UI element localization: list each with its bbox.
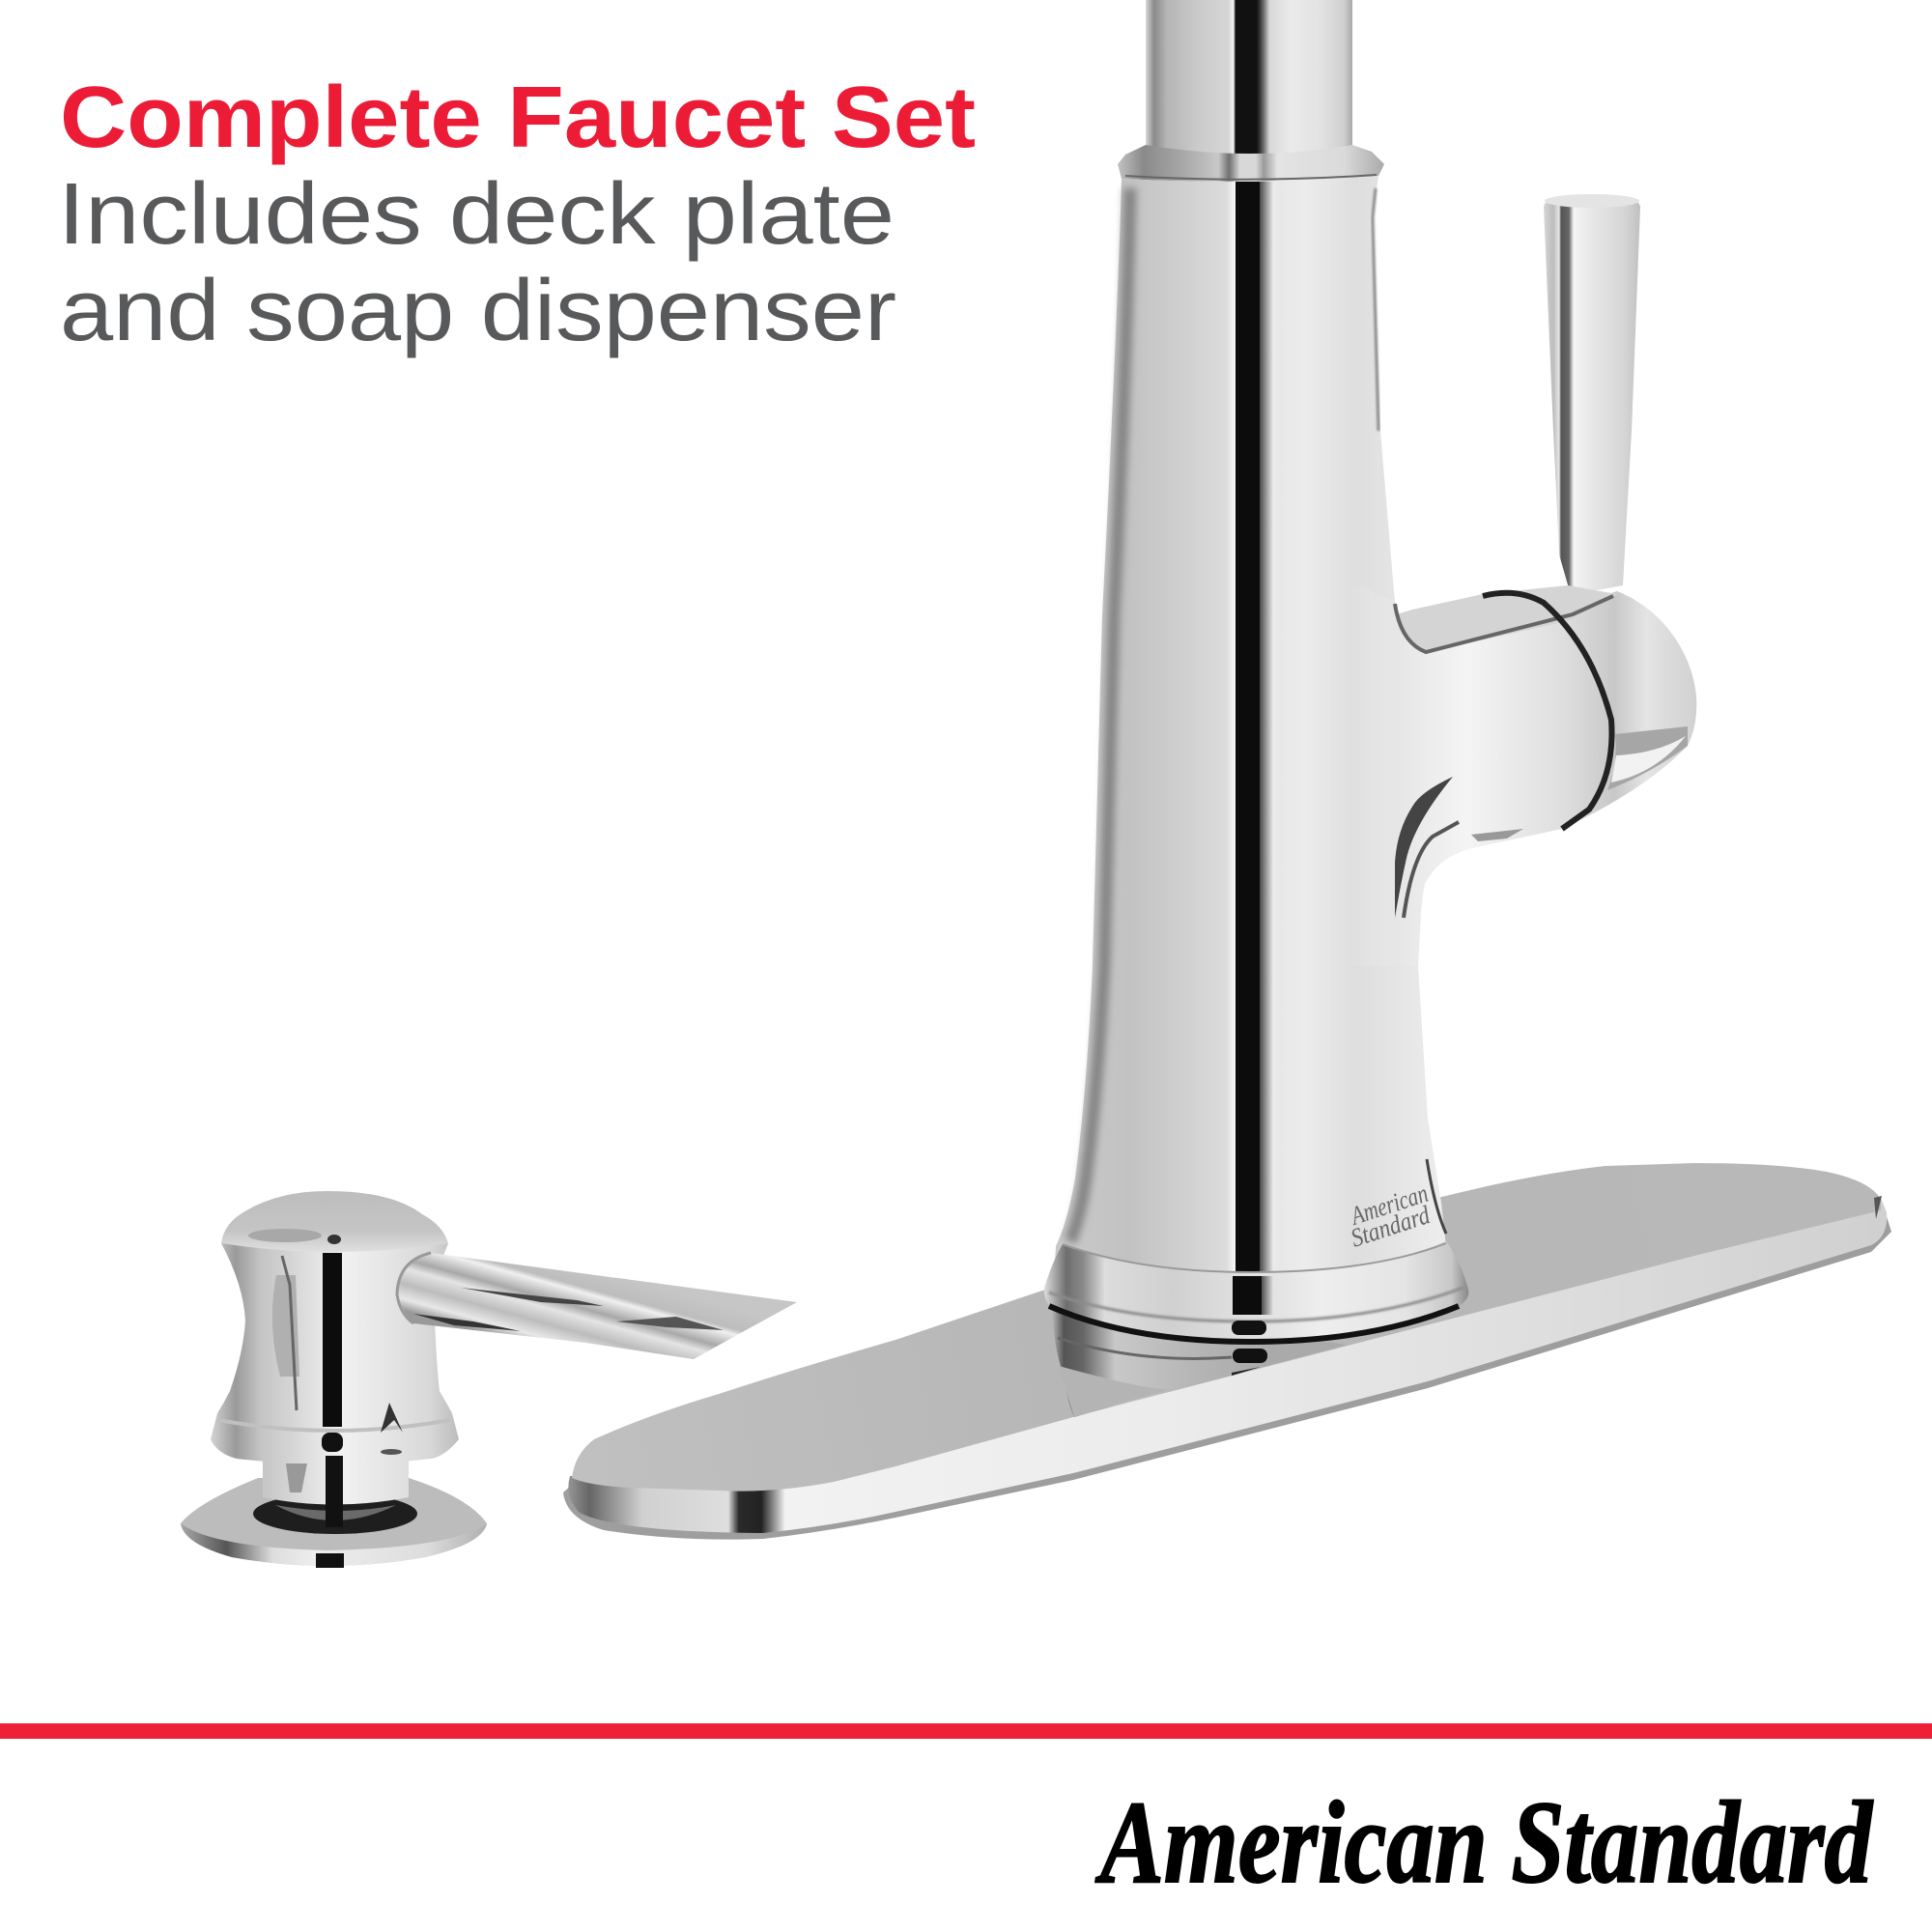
title: Complete Faucet Set	[60, 70, 976, 166]
plate rim shadow	[563, 1208, 1891, 1540]
cap glint	[327, 1235, 341, 1244]
body right edge shading	[1373, 188, 1378, 431]
dispenser rod reflection	[282, 1256, 297, 1410]
underside second swoosh	[1404, 822, 1459, 918]
spout end ring	[397, 1253, 431, 1323]
body lower right dark line	[1427, 1159, 1446, 1234]
body dark stripe	[1236, 182, 1260, 1273]
body left edge shading	[1070, 188, 1130, 1241]
housing top plane	[1397, 585, 1617, 653]
neck inner reflection	[286, 1463, 307, 1492]
faucet reflection in plate	[1051, 1304, 1348, 1417]
underside highlight blob	[1471, 829, 1523, 841]
spout	[398, 1253, 797, 1359]
base ring stripe lower blob	[1232, 1321, 1266, 1335]
handle housing	[1343, 580, 1696, 966]
red divider bar	[0, 1723, 1932, 1739]
flange dark stripe	[316, 1553, 344, 1568]
spout streak base	[413, 1314, 521, 1331]
cap lens reflection	[248, 1229, 322, 1242]
dispenser flange ring lines	[218, 1420, 450, 1431]
dispenser deck flange	[181, 1478, 487, 1566]
dispenser neck	[263, 1454, 409, 1505]
base ring shadow line	[1049, 1306, 1459, 1342]
plate top surface	[572, 1163, 1881, 1492]
base ring stripe fade	[1262, 1276, 1273, 1315]
spout streak upper	[461, 1288, 604, 1306]
small logo on faucet body	[1346, 1179, 1434, 1253]
dispenser stripe lower	[326, 1456, 343, 1527]
small logo on faucet body: American	[1346, 1179, 1432, 1231]
faucet neck	[1146, 0, 1352, 156]
collar lower line	[1125, 175, 1377, 180]
housing top plane dark edge	[1395, 596, 1613, 652]
dispenser recess inner	[275, 1505, 396, 1520]
lever top cap	[1545, 194, 1639, 208]
dispenser small blob	[381, 1449, 402, 1455]
dispenser inner reflection	[272, 1275, 299, 1377]
faucet collar	[1118, 145, 1384, 182]
faucet	[1044, 0, 1696, 1342]
dispenser flange edge	[181, 1523, 487, 1566]
dispenser small glint	[381, 1403, 403, 1433]
base ring stripe	[1233, 1276, 1262, 1315]
dispenser stripe blob	[322, 1433, 343, 1452]
plate corner glint	[1874, 1196, 1882, 1219]
plate front edge	[568, 1198, 1887, 1533]
lever	[1544, 194, 1640, 595]
dispenser recess	[253, 1493, 417, 1534]
dispenser body	[211, 1191, 459, 1464]
deck plate	[563, 1163, 1891, 1540]
soap dispenser	[181, 1191, 797, 1568]
ring groove line	[1049, 1288, 1463, 1321]
spout streak lower	[616, 1317, 724, 1330]
dispenser stripe	[323, 1253, 342, 1427]
housing reflection crescent	[1611, 736, 1686, 782]
housing collar groove	[1483, 593, 1612, 829]
body stripe right fade	[1260, 182, 1273, 1273]
ring upper line	[1063, 1243, 1446, 1272]
small logo on faucet body: Standard	[1348, 1200, 1434, 1253]
dispenser cap	[221, 1191, 448, 1252]
neck stripe fade	[1257, 0, 1268, 155]
housing lower reflection	[1607, 726, 1688, 790]
subtitle line two: and soap dispenser	[60, 263, 896, 359]
subtitle line one: Includes deck plate	[58, 166, 895, 263]
text block: headline	[58, 70, 976, 359]
underside swoosh	[1395, 777, 1453, 918]
faucet body	[1053, 176, 1459, 1294]
base ring	[1044, 1241, 1468, 1341]
